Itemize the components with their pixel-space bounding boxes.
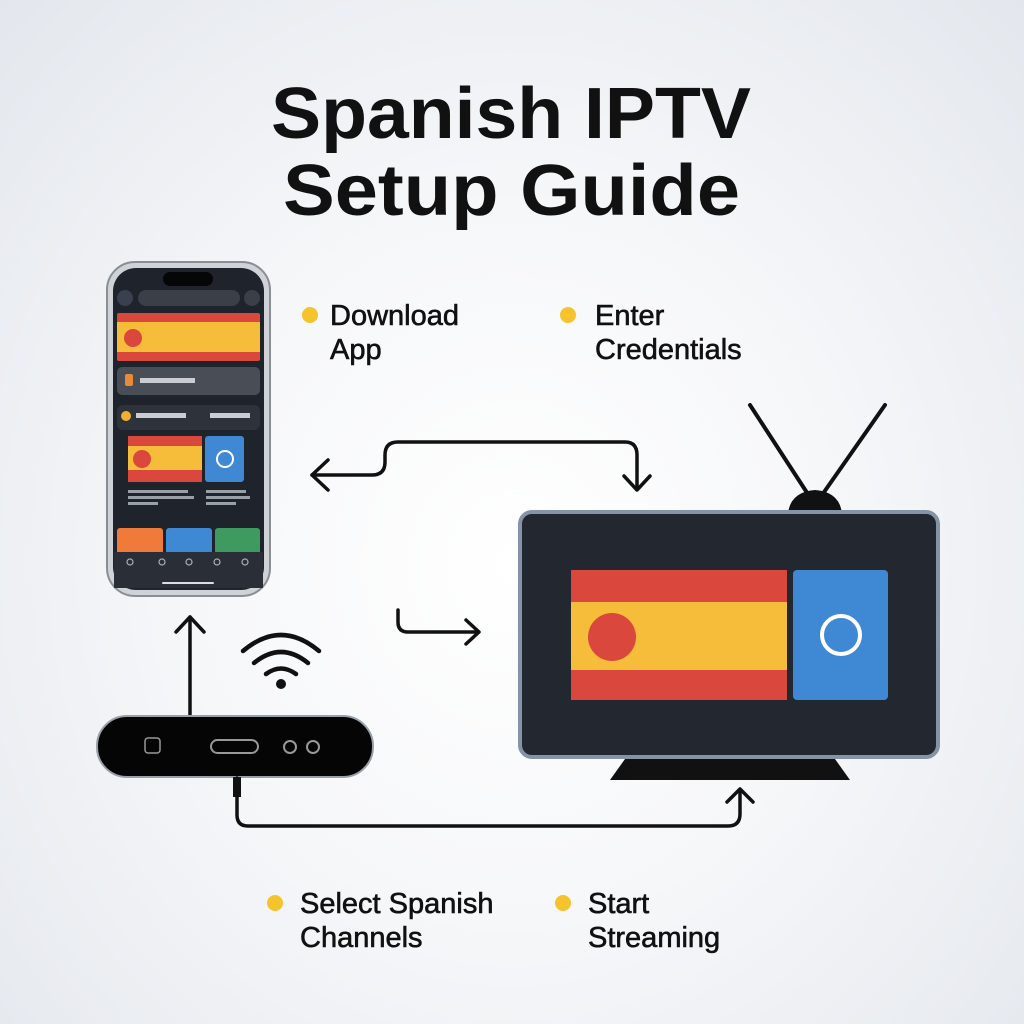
step: start streaming <box>555 888 720 954</box>
router <box>97 716 373 777</box>
icon: wifi <box>243 635 319 689</box>
step: start streaming: Streaming <box>588 922 720 954</box>
cable: router to tv <box>233 777 753 826</box>
step: download app <box>302 300 459 366</box>
tv <box>520 405 938 780</box>
arrow: to tv <box>398 610 479 644</box>
title <box>271 74 751 231</box>
title: Spanish IPTV <box>271 74 751 154</box>
phone <box>107 262 270 596</box>
step: select spanish channels: Channels <box>300 922 423 954</box>
step: select spanish channels: Select Spanish <box>300 888 493 920</box>
title: Setup Guide <box>283 151 740 231</box>
step: download app: Download <box>330 300 459 332</box>
step: enter credentials: Enter <box>595 300 665 332</box>
arrow: router to phone <box>176 617 204 716</box>
step: enter credentials <box>560 300 742 366</box>
step: download app: App <box>330 334 382 366</box>
step: select spanish channels <box>267 888 493 954</box>
step: start streaming: Start <box>588 888 649 920</box>
arrow: phone-tv loop <box>312 442 650 490</box>
step: enter credentials: Credentials <box>595 334 742 366</box>
